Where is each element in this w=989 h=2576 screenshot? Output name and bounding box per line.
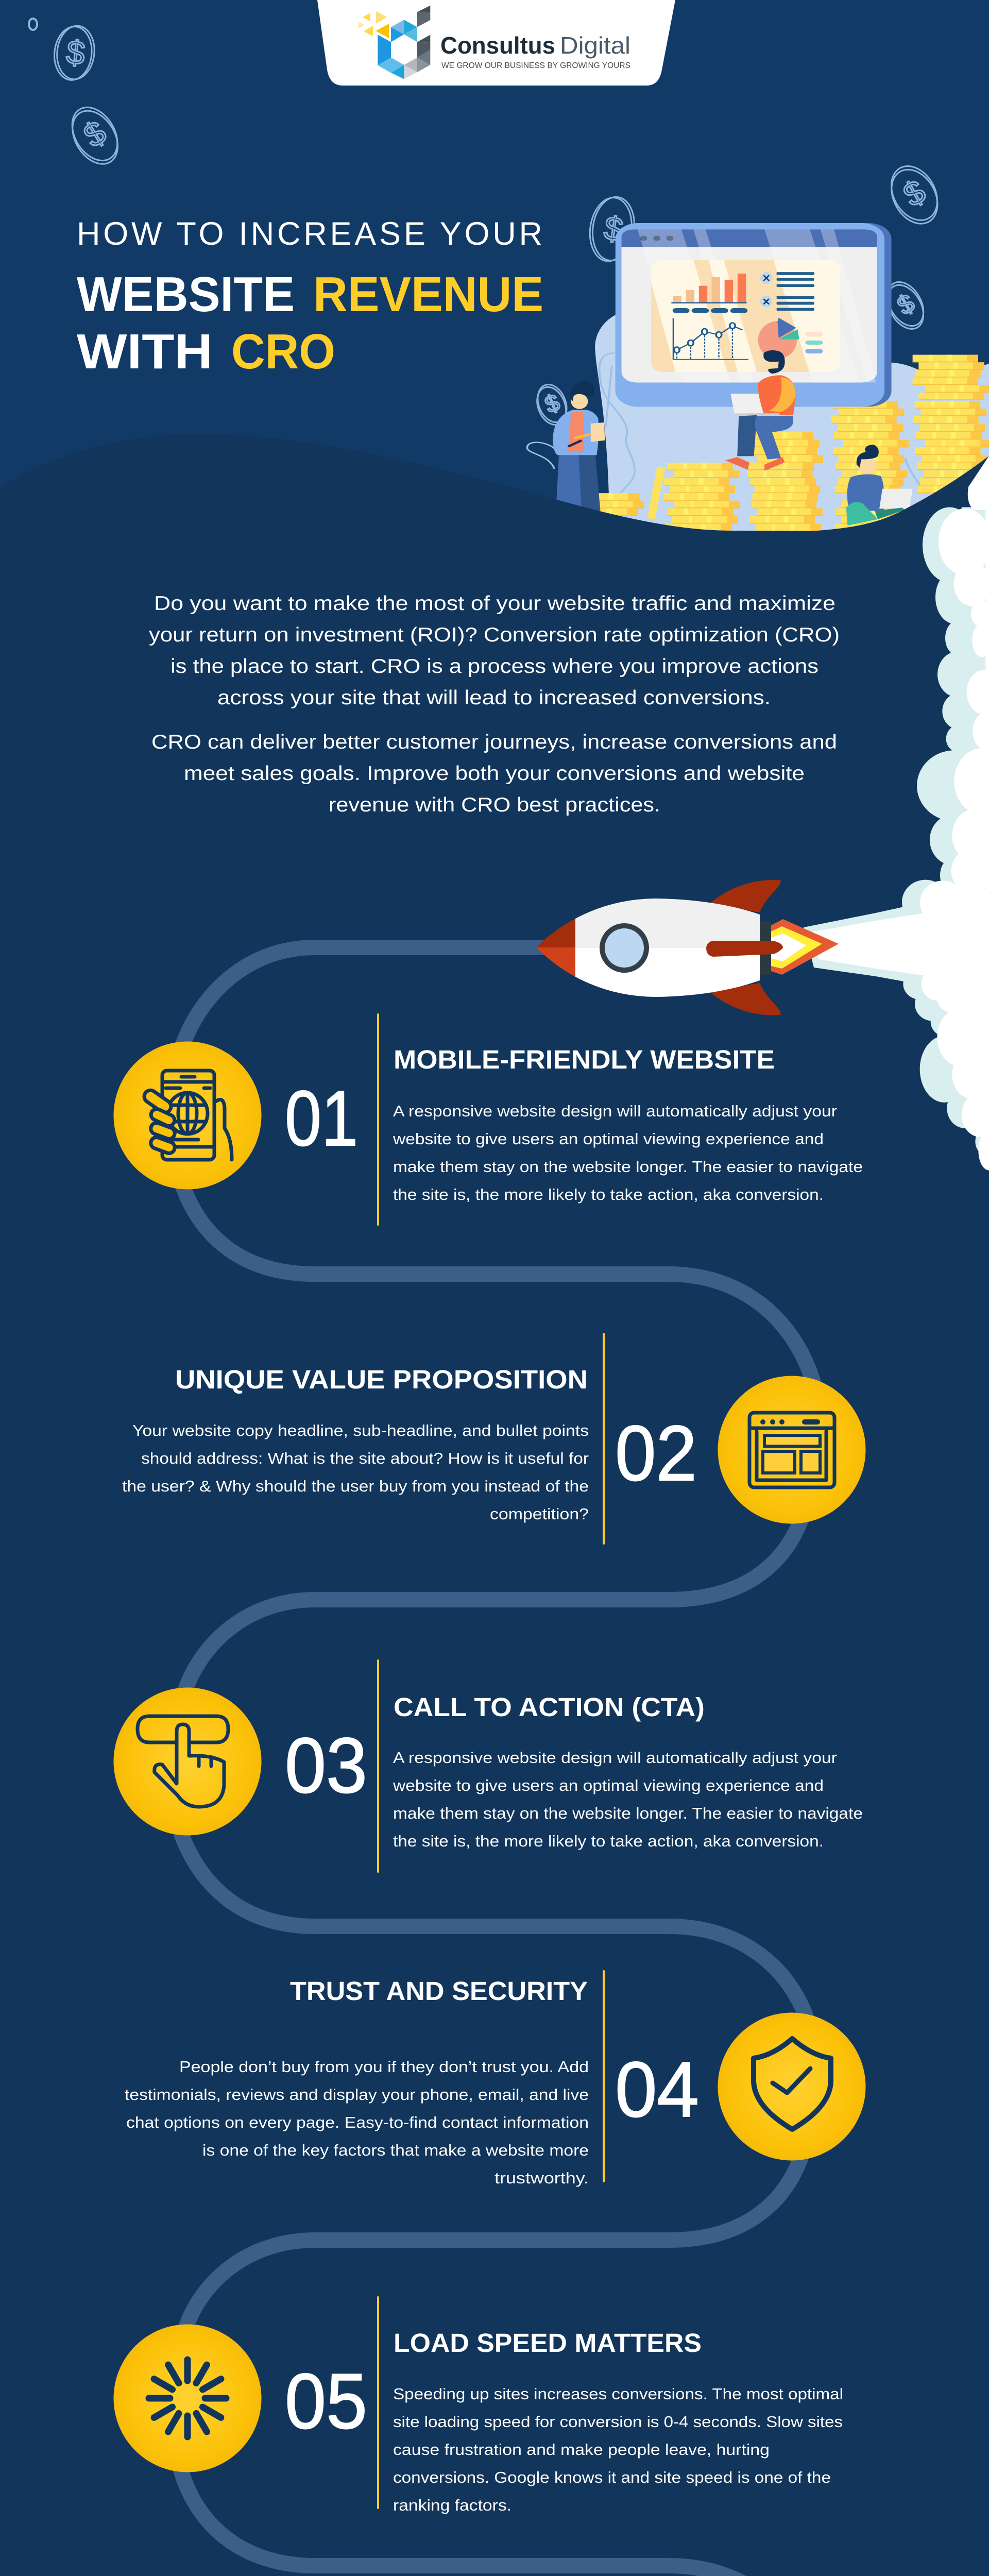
intro text: meet sales goals. Improve both your conversions and website: [184, 762, 805, 785]
step 03: [113, 1659, 863, 1873]
step 01: [113, 1013, 863, 1226]
step 04: [125, 1970, 865, 2187]
divider: [377, 2296, 379, 2509]
divider: [603, 1970, 605, 2182]
number: 05: [285, 2358, 367, 2445]
logo panel: header: [317, 0, 675, 86]
number: 04: [615, 2046, 699, 2133]
body text: cause frustration and make people leave, hurting: [393, 2441, 770, 2459]
body text: website to give users an optimal viewing experience and: [393, 1776, 824, 1794]
body text: make them stay on the website longer. The easier to navigate: [393, 1804, 863, 1822]
body text: website to give users an optimal viewing experience and: [393, 1130, 824, 1148]
seated person with laptop: [846, 445, 913, 526]
intro text: Do you want to make the most of your website traffic and maximize: [154, 592, 835, 615]
standing person: [553, 381, 605, 511]
dashboard bar chart: [671, 274, 747, 313]
divider: [603, 1333, 605, 1545]
body text: ranking factors.: [393, 2496, 511, 2514]
intro text: CRO can deliver better customer journeys, increase conversions and: [151, 731, 837, 753]
body text: [393, 1102, 863, 1204]
divider: [377, 1659, 379, 1873]
logo name: Consultus: [440, 32, 555, 59]
heading: LOAD SPEED MATTERS: [394, 2328, 702, 2358]
step 05: [113, 2296, 843, 2514]
body text: is one of the key factors that make a website more: [202, 2141, 589, 2159]
body text: the site is, the more likely to take action, aka conversion.: [393, 1832, 824, 1850]
body text: People don’t buy from you if they don’t trust you. Add: [179, 2058, 589, 2076]
intro text: [149, 592, 840, 816]
body text: site loading speed for conversion is 0-4 seconds. Slow sites: [393, 2413, 843, 2431]
intro text: revenue with CRO best practices.: [329, 794, 660, 816]
icon: browser window: [718, 1376, 865, 1524]
icon: logo mark: [359, 6, 430, 79]
body text: the user? & Why should the user buy from you instead of the: [122, 1477, 589, 1495]
heading: TRUST AND SECURITY: [290, 1976, 588, 2006]
body text: make them stay on the website longer. The easier to navigate: [393, 1158, 863, 1176]
logo tagline: WE GROW OUR BUSINESS BY GROWING YOURS: [441, 61, 630, 70]
icon: loading spinner: [113, 2325, 262, 2472]
winding road path: [180, 947, 813, 2576]
decorative coin outlines: [29, 19, 948, 429]
icon: rocket: [536, 880, 839, 1015]
step 02: [122, 1333, 865, 1545]
body text: A responsive website design will automatically adjust your: [393, 1102, 837, 1120]
body text: Your website copy headline, sub-headline, and bullet points: [132, 1421, 589, 1439]
logo panel: header: Digital: [560, 32, 630, 59]
intro text: is the place to start. CRO is a process where you improve actions: [170, 655, 819, 677]
intro text: your return on investment (ROI)? Conversion rate optimization (CRO): [149, 624, 840, 646]
body text: [393, 1749, 863, 1850]
body text: [393, 2385, 843, 2514]
dashboard pie chart: [758, 318, 823, 359]
body text: competition?: [490, 1505, 589, 1523]
body text: the site is, the more likely to take action, aka conversion.: [393, 1185, 824, 1204]
heading: CALL TO ACTION (CTA): [394, 1692, 705, 1722]
body text: [122, 1421, 589, 1523]
number: 03: [285, 1722, 367, 1809]
person on coins: [725, 350, 796, 471]
decorative coin outlines: $: [602, 209, 625, 248]
title: [77, 216, 543, 379]
decorative coin outlines: $: [897, 173, 931, 214]
wave: [0, 434, 989, 567]
body text: testimonials, reviews and display your phone, email, and live: [125, 2086, 589, 2104]
body text: Speeding up sites increases conversions. The most optimal: [393, 2385, 843, 2403]
body text: A responsive website design will automatically adjust your: [393, 1749, 837, 1767]
icon: shield check: [718, 2012, 865, 2161]
decorative coin outlines: $: [892, 289, 919, 320]
coin stacks: [572, 355, 989, 531]
body text: should address: What is the site about? How is it useful for: [141, 1449, 589, 1467]
body text: trustworthy.: [494, 2169, 589, 2187]
title: REVENUE: [313, 267, 543, 322]
monitor: [616, 223, 892, 406]
icon: phone with globe: [113, 1042, 262, 1189]
title: CRO: [231, 324, 335, 379]
divider: [377, 1013, 379, 1226]
body text: chat options on every page. Easy-to-find contact information: [126, 2113, 589, 2131]
dashboard line chart: [673, 318, 748, 360]
title: WITH: [77, 324, 213, 379]
illustration: hero monitor, coins and people: [527, 223, 989, 536]
body text: conversions. Google knows it and site speed is one of the: [393, 2468, 831, 2486]
body text: [125, 2058, 589, 2187]
number: 01: [285, 1075, 358, 1162]
decorative coin outlines: $: [77, 113, 112, 155]
heading: UNIQUE VALUE PROPOSITION: [175, 1365, 588, 1394]
number: 02: [615, 1410, 697, 1497]
cloud: rocket exhaust: [804, 456, 989, 1171]
decorative coin outlines: $: [65, 33, 87, 72]
title: WEBSITE: [77, 267, 295, 322]
decorative coin outlines: $: [541, 388, 564, 418]
title: HOW TO INCREASE YOUR: [77, 216, 542, 252]
dashboard list: [760, 272, 814, 311]
icon: hand pressing button: [113, 1688, 262, 1835]
heading: MOBILE-FRIENDLY WEBSITE: [394, 1045, 775, 1074]
intro text: across your site that will lead to increased conversions.: [217, 687, 771, 709]
